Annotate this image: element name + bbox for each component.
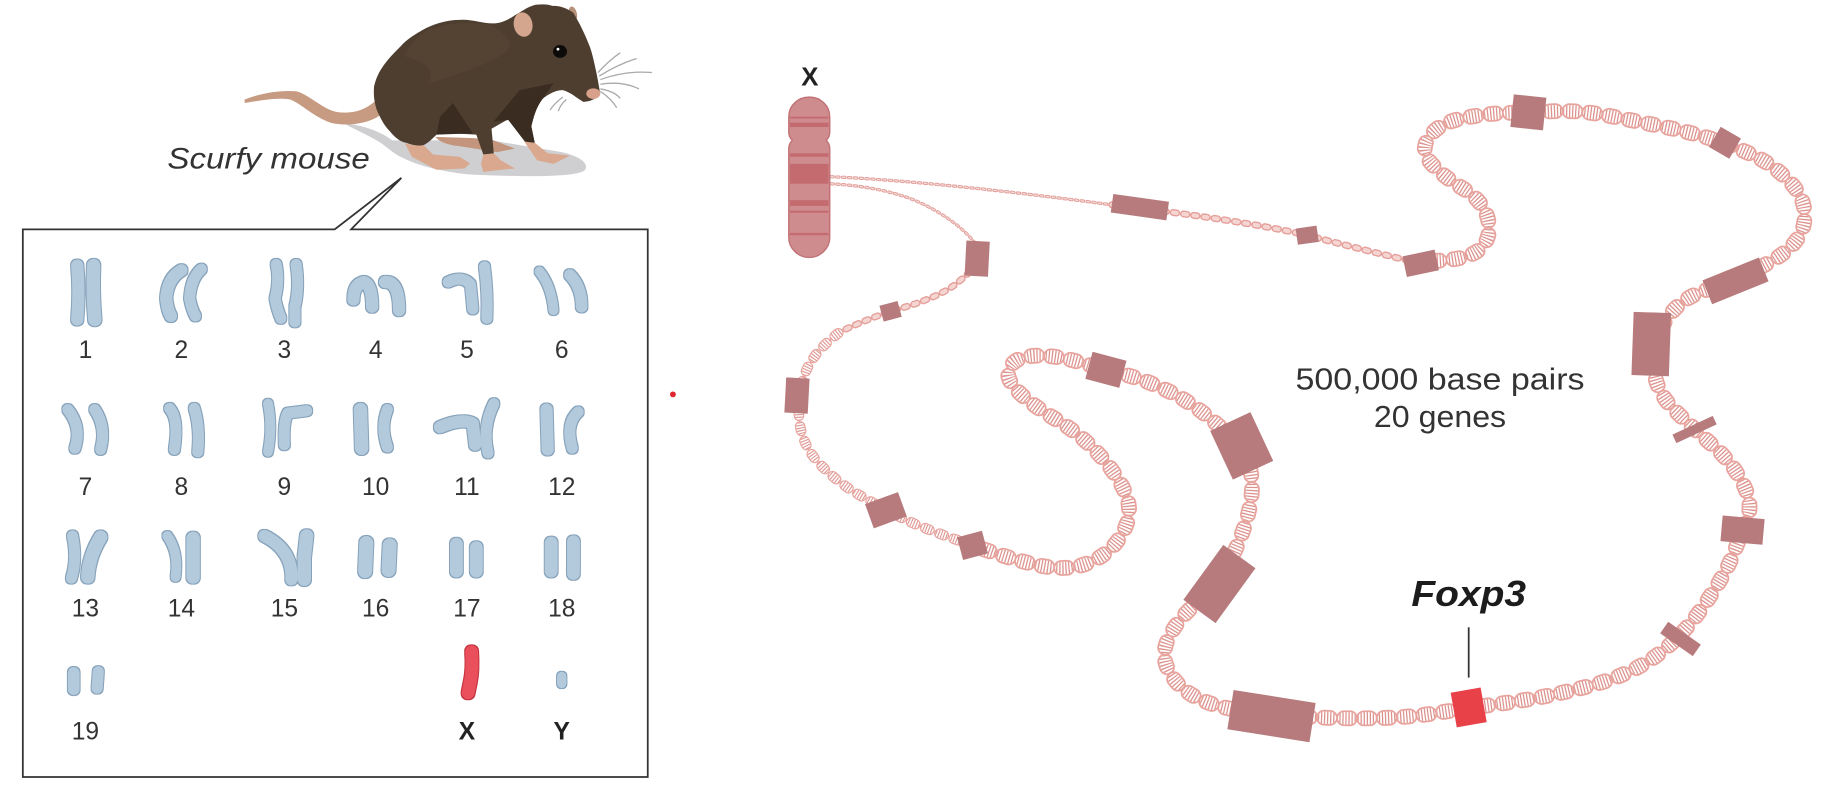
front foot right: [524, 142, 570, 164]
chromosome 12: [547, 410, 578, 449]
chromosome 6: [540, 272, 582, 310]
karyotype panel: [23, 178, 648, 777]
X chromosome ideogram: [789, 97, 830, 257]
autosome chromosomes: [68, 264, 582, 689]
eye: [553, 45, 567, 58]
label: base pairs and genes: [1295, 363, 1585, 434]
chromosome number labels: 3: [278, 337, 291, 364]
label: base pairs and genes: 500,000 base pairs: [1295, 363, 1585, 397]
front foot left: [481, 153, 515, 172]
chromosome number labels: 11: [454, 474, 480, 501]
panel frame with callout pointer: [23, 178, 648, 777]
chromosome 18: [551, 542, 573, 573]
chromosome number labels: 17: [453, 596, 481, 623]
chromosome number labels: 16: [362, 596, 389, 623]
gene block: [865, 492, 907, 528]
far hind foot: [435, 137, 515, 152]
chromosome number labels: 1: [79, 337, 92, 364]
red dot: [670, 391, 676, 397]
chromosome number labels: 19: [72, 719, 99, 746]
gene block: [1402, 250, 1439, 277]
illustration: scurfy mouse: [245, 4, 652, 176]
chromosome 9: [268, 404, 307, 452]
chromosome number labels: 4: [369, 337, 383, 364]
mouse belly shadow: [437, 83, 554, 143]
gene block: [1111, 194, 1169, 220]
gene block: [1510, 94, 1546, 130]
large helix segments: [973, 111, 1805, 718]
gene block: [1085, 352, 1127, 388]
chromosome number labels: 12: [548, 474, 575, 501]
small helix segments: [837, 205, 1421, 334]
chromosome number labels: 9: [278, 474, 291, 501]
gene block: [1183, 545, 1255, 623]
chromosome 17: [456, 544, 476, 571]
chromosome 8: [170, 408, 198, 452]
chromosome 7: [68, 410, 103, 449]
chromosome number labels: 5: [460, 337, 474, 364]
chromosome body: [789, 97, 830, 257]
label: X: X: [801, 63, 818, 91]
chromosome number labels: X: [459, 719, 476, 746]
mouse body: [374, 4, 600, 154]
chromosome 4: [353, 282, 399, 310]
chromosome 19: [74, 672, 98, 689]
mouse shadow: [343, 123, 586, 176]
nose: [586, 88, 600, 99]
chromosome 1: [77, 266, 95, 319]
chromosome X highlighted in red: [468, 652, 472, 693]
chromosome number labels: 7: [79, 474, 92, 501]
chromosome number labels: 18: [548, 596, 575, 623]
mouse tail: [245, 91, 379, 124]
chromosome 2: [166, 269, 201, 316]
chromosome number labels: 8: [175, 474, 188, 501]
gene block: [784, 377, 810, 414]
gene block: [879, 301, 902, 322]
chromosome number labels: 13: [72, 596, 99, 623]
label: base pairs and genes: 20 genes: [1374, 400, 1506, 434]
chromosome 5: [448, 267, 487, 318]
chromosome number labels: 6: [555, 337, 569, 364]
Foxp3 gene block: [1451, 687, 1487, 727]
gene block: [1709, 127, 1741, 159]
far ear: [567, 6, 578, 22]
chromosome 11: [440, 404, 494, 453]
chromosome 3: [275, 264, 298, 322]
gene block: [965, 240, 990, 277]
chromosome 15: [264, 536, 307, 579]
chromosome 10: [360, 410, 387, 448]
gene block: [1227, 690, 1316, 742]
gene block: [1210, 412, 1273, 480]
gene block: [1720, 515, 1765, 545]
gene block: [1672, 416, 1717, 443]
hind foot: [405, 143, 470, 170]
chromosome number labels: 14: [168, 596, 195, 623]
chromosome Y: [558, 676, 566, 683]
mouse back highlight: [404, 23, 510, 84]
DNA strand: [784, 94, 1805, 742]
chromosome number labels: Y: [554, 719, 570, 746]
near ear: [512, 11, 534, 38]
label: Scurfy mouse: Scurfy mouse: [167, 144, 370, 176]
medium helix segments: [799, 330, 973, 545]
gene block: [1702, 258, 1769, 304]
thin helix segments: [831, 177, 1112, 246]
chromosome 13: [71, 536, 101, 578]
gene blocks: [784, 94, 1769, 742]
label: Foxp3: Foxp3: [1411, 573, 1526, 614]
whiskers: [550, 53, 652, 111]
chromosome number labels: [72, 337, 575, 746]
chromosome number labels: 10: [362, 474, 389, 501]
chromosome 14: [167, 536, 193, 577]
chromosome bands: [790, 117, 829, 235]
chromosome 16: [365, 543, 390, 571]
gene block: [957, 531, 988, 560]
chromosome number labels: 15: [271, 596, 298, 623]
gene block: [1631, 312, 1671, 376]
Foxp3 pointer line: [1468, 627, 1470, 678]
gene block: [1660, 622, 1701, 656]
gene block: [1296, 226, 1319, 245]
chromosome number labels: 2: [175, 337, 188, 364]
